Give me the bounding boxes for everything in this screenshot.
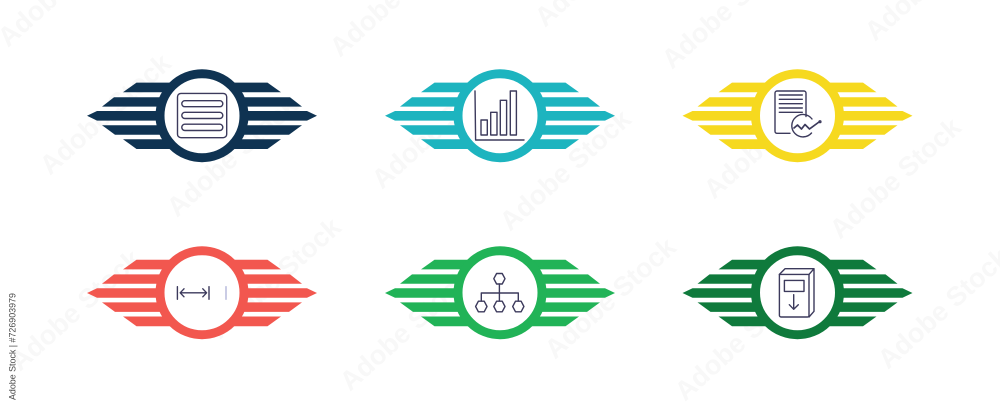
- stock id text: Adobe Stock | #726903979: [8, 293, 18, 400]
- watermark pattern: Adobe Stock: [494, 103, 637, 236]
- watermark pattern: Adobe Stock: [824, 111, 967, 244]
- watermark pattern: Adobe Stock: [4, 243, 147, 376]
- watermark pattern: Adobe Stock: [669, 273, 812, 406]
- watermark pattern: Adobe Stock: [698, 71, 841, 204]
- green ring: [458, 251, 542, 335]
- yellow ring: [756, 74, 840, 158]
- badge: dark green download box: [682, 251, 912, 335]
- watermark pattern: Adobe Stock: [161, 89, 304, 222]
- watermark pattern: Adobe Stock: [539, 231, 682, 364]
- icon: report with wave chart: [775, 91, 821, 137]
- icon: list panel: [178, 93, 227, 138]
- navy ring: [160, 74, 244, 158]
- dark green ring: [756, 251, 840, 335]
- icon: width arrow: [177, 287, 226, 299]
- watermark pattern: Adobe Stock: [366, 61, 509, 194]
- badge: navy list: [87, 74, 317, 158]
- icon: hierarchy: [476, 274, 524, 312]
- badge: green hierarchy: [385, 251, 615, 335]
- green wings: [385, 260, 615, 326]
- icon: bar chart: [475, 91, 524, 140]
- watermark pattern: Adobe Stock: [34, 47, 177, 180]
- badge: red measure: [87, 251, 317, 335]
- navy wings: [87, 83, 317, 149]
- watermark pattern: Adobe Stock: [204, 211, 347, 344]
- teal ring: [458, 74, 542, 158]
- dark green wings: [682, 260, 912, 326]
- badge: teal bar chart: [385, 74, 615, 158]
- red wings: [87, 260, 317, 326]
- teal wings: [385, 83, 615, 149]
- watermark pattern: Adobe Stock: [334, 263, 477, 396]
- yellow wings: [682, 83, 912, 149]
- badge: yellow report: [682, 74, 912, 158]
- red ring: [160, 251, 244, 335]
- icon: download box: [779, 269, 814, 317]
